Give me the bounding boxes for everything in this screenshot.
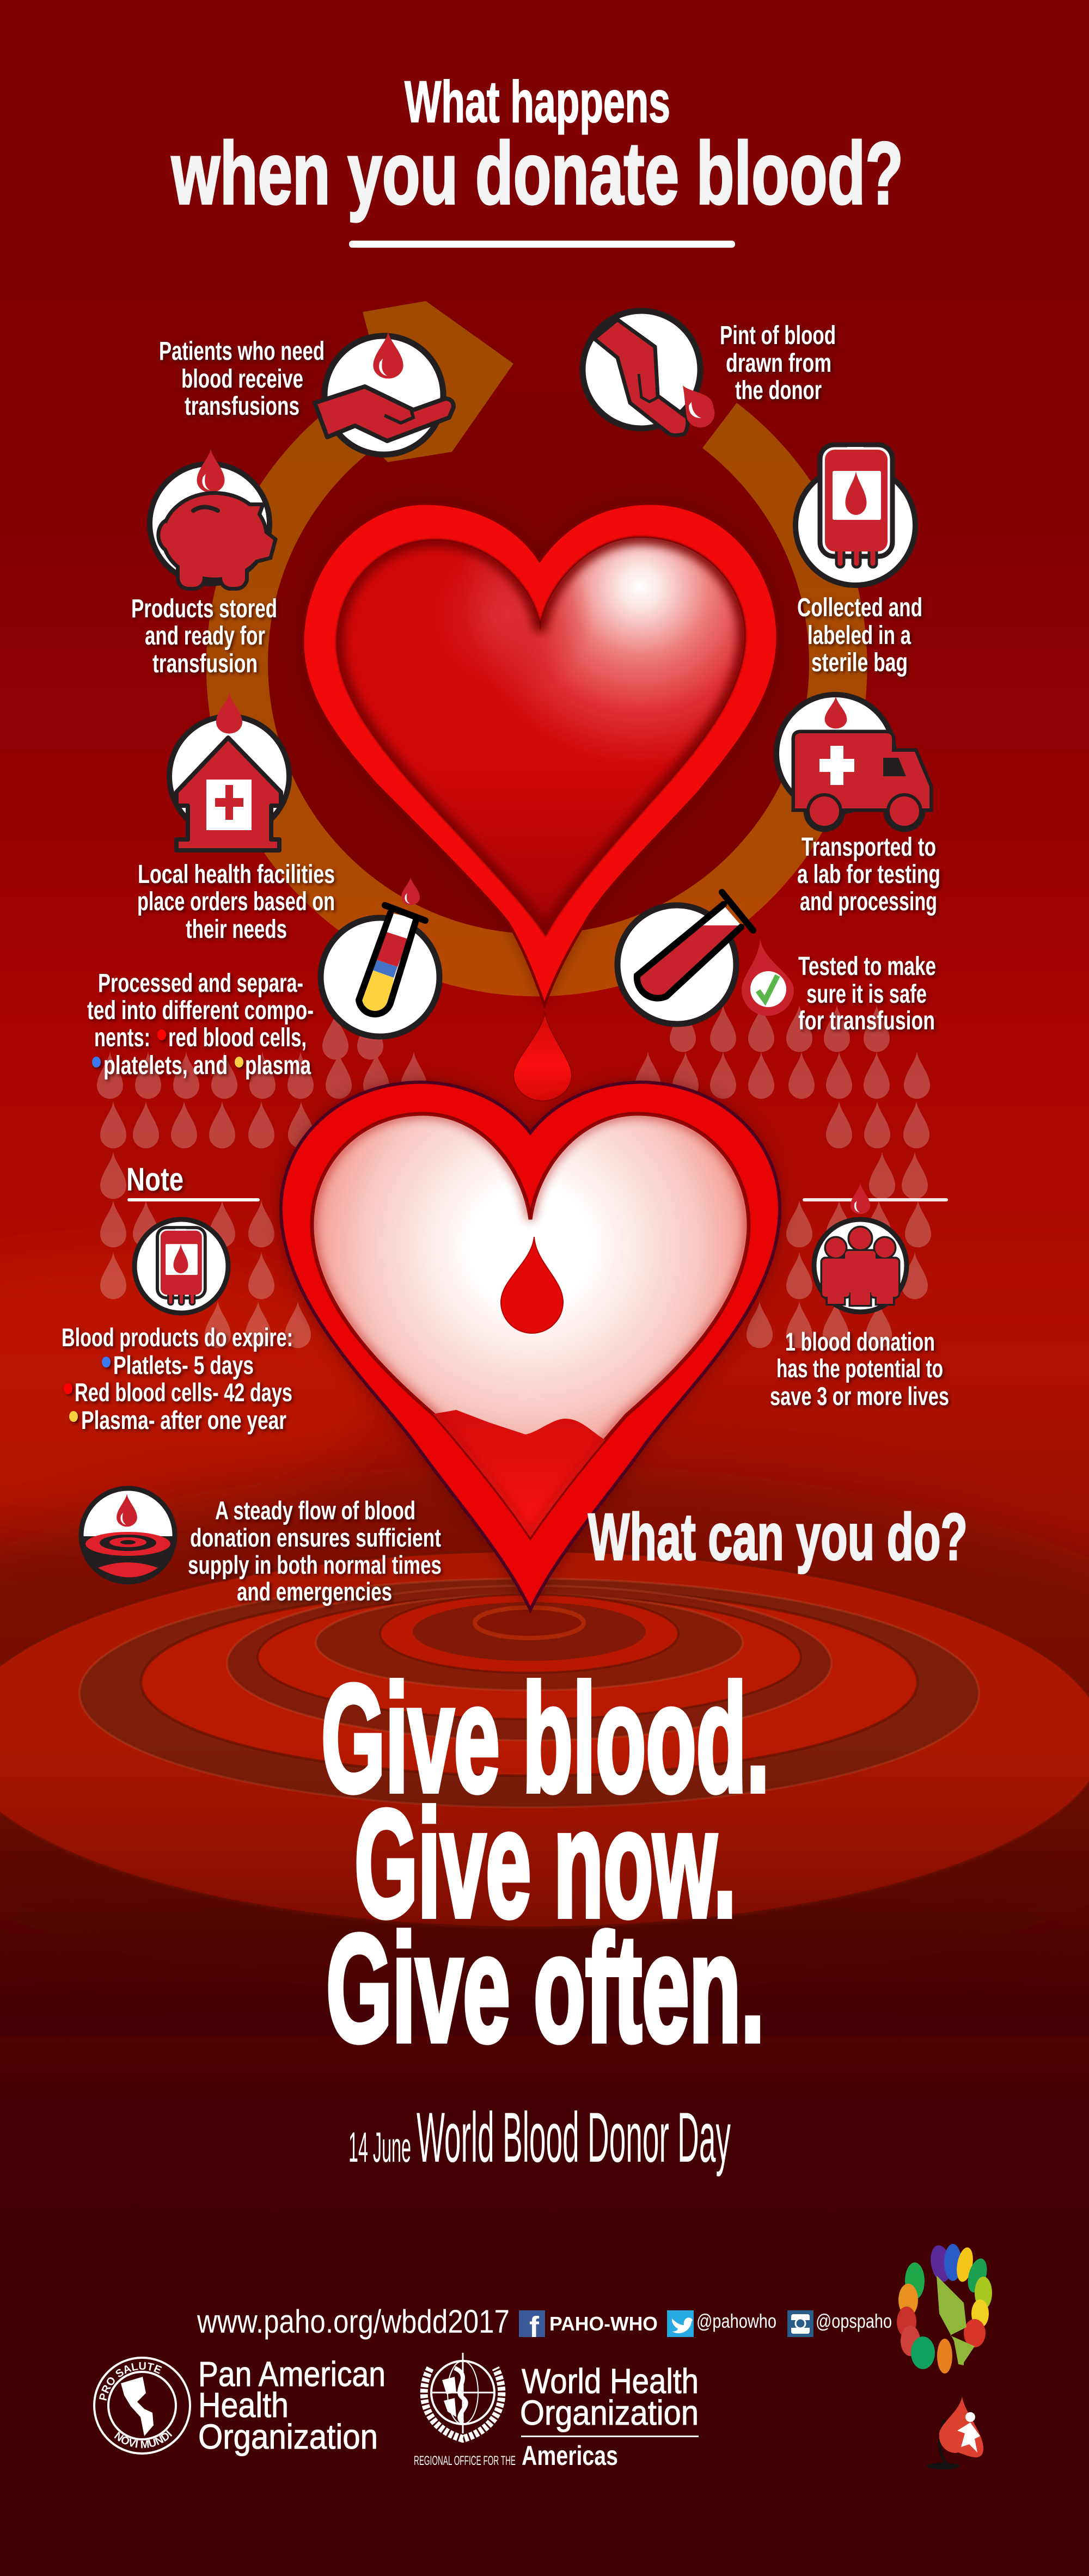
social: facebook: f [529,2311,540,2344]
top heart [303,504,778,1005]
social: facebook: PAHO-WHO [549,2313,658,2335]
text: tested: sure it is safe [806,980,927,1009]
website: www.paho.org/wbdd2017 [197,2303,510,2340]
text: collected: labeled in a [807,621,911,650]
icon: piggy bank [150,449,273,587]
icon: truck [776,695,929,829]
text: products [131,594,277,678]
text: expiry note: Red blood cells- 42 days [75,1378,292,1407]
droplet pattern [97,1005,931,1348]
logo text: PAHO: Organization [198,2417,378,2456]
text: collected: Collected and [797,593,922,622]
background ripple rings [0,1464,1089,2036]
text: processed: plasma [245,1051,311,1080]
text: lives saved [770,1327,949,1410]
text: transported: and processing [800,887,937,916]
text: expiry note: Platlets- 5 days [113,1351,254,1379]
text: pint: drawn from [726,349,831,378]
social: twitter [667,2310,776,2337]
logo: colourful hearts map [897,2243,992,2373]
text: local facilities [137,860,335,944]
social: facebook [519,2310,658,2344]
logo text: WHO: REGIONAL OFFICE FOR THE [414,2454,516,2468]
text: collected [797,593,922,677]
logo: world blood donor day drop [927,2396,983,2469]
text: products: Products stored [131,594,277,623]
text: lives saved: save 3 or more lives [770,1382,949,1410]
text: steady flow: and emergencies [237,1577,392,1606]
text: steady flow [188,1496,442,1606]
icon: ripple [81,1488,175,1584]
text: processed: red blood cells, [168,1023,307,1052]
text: lives saved: has the potential to [776,1354,943,1383]
call to action: Give now. [354,1779,736,1949]
icon: hand receiving blood [315,332,454,455]
icon: separated test tube [321,877,439,1036]
title [171,69,903,248]
text: processed [87,969,314,1080]
icon: tested tube [617,892,753,1024]
title: What happens [405,69,670,134]
social: twitter: @pahowho [696,2310,776,2332]
text: products: transfusion [152,649,258,678]
text: tested: Tested to make [798,952,936,981]
text: pint [720,321,836,405]
logo: PAHO seal [93,2357,191,2455]
logo text: PAHO: Pan American [198,2354,386,2394]
text: transported: a lab for testing [797,860,940,889]
social: instagram [787,2310,892,2337]
text: steady flow: donation ensures sufficient [190,1523,441,1552]
note heading: Note [126,1161,183,1198]
text: patients [159,337,325,421]
logo text: WHO [414,2362,699,2471]
logo: PAHO seal: NOVI MUNDI [114,2430,172,2449]
icon: drop with check mark [742,939,794,1016]
blood level in heart [433,1410,605,1537]
text: local facilities: their needs [186,915,287,944]
cycle arrow ring [206,301,867,996]
text: steady flow: supply in both normal times [188,1550,442,1579]
text: expiry note: Blood products do expire: [62,1323,293,1352]
logo text: PAHO [198,2354,386,2456]
bottom heart [281,1082,780,1610]
text: processed: Processed and separa- [98,969,303,998]
logo: PAHO seal: PRO SALUTE [99,2362,162,2401]
logo text: WHO: Organization [520,2393,699,2432]
text: local facilities: Local health facilities [138,860,335,889]
logo text: PAHO: Health [198,2385,289,2425]
logo: WHO emblem [424,2353,501,2439]
text: transported [797,833,940,916]
drop between hearts [513,1011,572,1101]
text: products: and ready for [145,622,265,651]
text: pint: Pint of blood [720,321,836,350]
note heading [126,1161,260,1201]
text: tested [798,952,936,1035]
icon: blood bag [796,445,915,585]
text: processed: nents: [94,1023,150,1052]
world blood donor day: 14 June [348,2123,411,2171]
text: steady flow: A steady flow of blood [215,1496,415,1525]
text: expiry note [62,1323,293,1434]
text: pint: the donor [735,376,822,405]
text: transported: Transported to [802,833,936,862]
text: expiry note: Plasma- after one year [81,1406,286,1434]
text: lives saved: 1 blood donation [785,1327,935,1356]
text: processed: ted into different compo- [87,996,314,1025]
text: patients: Patients who need [159,337,325,366]
icon: arm drawing blood [583,311,714,436]
icon: note blood bag [134,1219,228,1313]
text: processed: platelets, and [103,1051,228,1080]
text: tested: for transfusion [798,1007,935,1035]
text: local facilities: place orders based on [137,887,335,916]
text: patients: blood receive [181,365,303,394]
world blood donor day [348,2097,731,2177]
logo text: WHO: Americas [522,2440,618,2471]
text: patients: transfusions [185,392,299,421]
text: collected: sterile bag [811,648,908,677]
icon: people with divider [803,1183,948,1312]
logo text: WHO: World Health [522,2362,699,2401]
call to action [321,1654,769,2074]
drop inside heart [501,1237,563,1333]
social: instagram: @opspaho [816,2310,892,2332]
icon: health facility [169,692,289,850]
